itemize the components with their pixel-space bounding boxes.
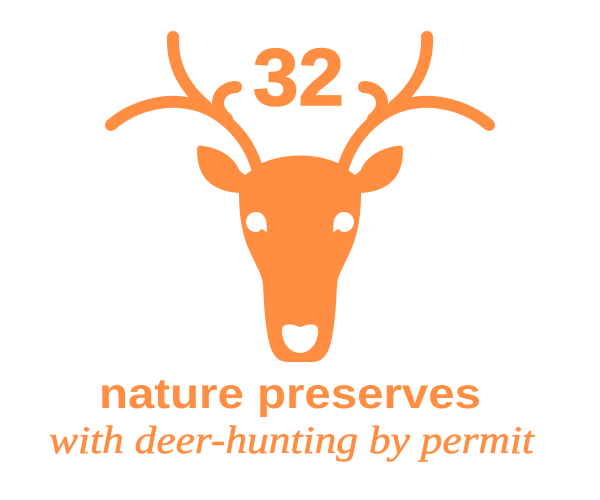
- right ear: [348, 146, 403, 193]
- heading: nature preserves: [99, 370, 481, 418]
- face with eyes and mouth cut out: [239, 156, 361, 362]
- subheading: with deer-hunting by permit: [49, 419, 535, 462]
- icon: deer head: [111, 37, 489, 362]
- big number: 32: [253, 33, 344, 123]
- left antler: [111, 37, 257, 168]
- left ear: [197, 146, 252, 193]
- right antler: [343, 37, 489, 168]
